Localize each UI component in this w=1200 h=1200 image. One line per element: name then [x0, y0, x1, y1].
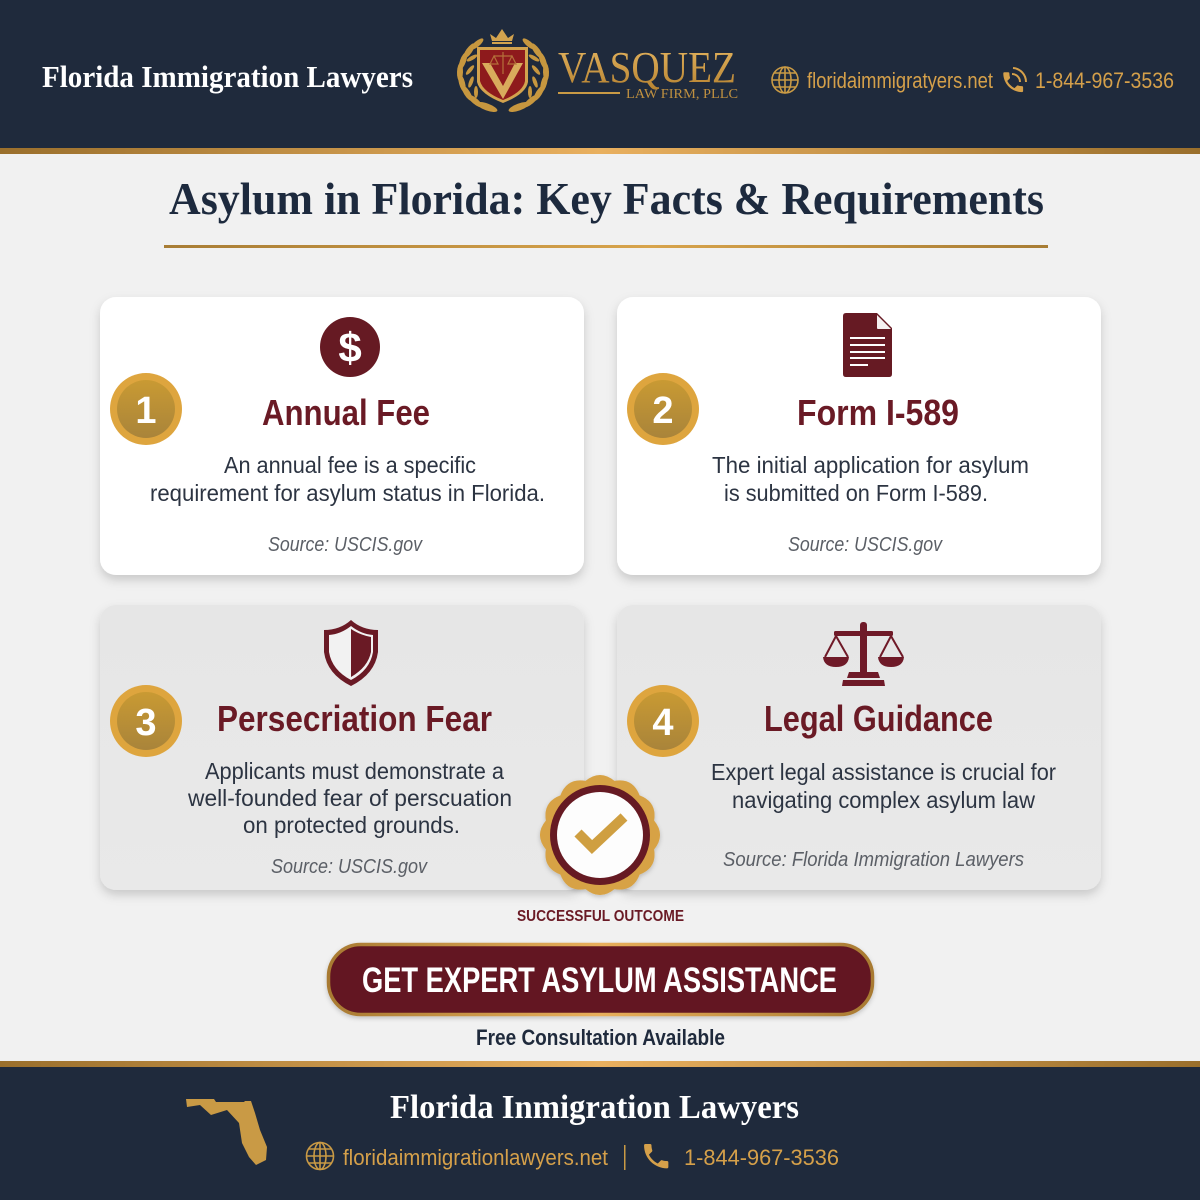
description: [711, 759, 1056, 813]
badge 1: [110, 373, 182, 445]
heading: Persecriation Fear: [217, 698, 492, 739]
call-to-action button: GET EXPERT ASYLUM ASSISTANCE: [362, 961, 837, 1000]
header band: [0, 0, 1200, 154]
icon: document: [843, 313, 892, 377]
badge 1: 1: [135, 390, 157, 432]
description: The initial application for asylum: [712, 452, 1029, 478]
logo crown: [490, 29, 514, 44]
logo: Vasquez crest: [457, 29, 549, 114]
footer contact: [306, 1142, 839, 1170]
title: Asylum in Florida: Key Facts & Requirements: [169, 173, 1044, 224]
description: An annual fee is a specific: [224, 452, 476, 478]
description: [712, 452, 1029, 506]
logo wordmark: VASQUEZ: [558, 43, 736, 92]
badge 2: 2: [652, 390, 674, 432]
icon: dollar: [320, 317, 380, 377]
source: Source: USCIS.gov: [788, 534, 943, 556]
description: [150, 452, 545, 506]
badge 4: 4: [652, 702, 674, 744]
footer contact: 1-844-967-3536: [684, 1145, 839, 1170]
icon: globe: [772, 67, 798, 93]
description: navigating complex asylum law: [732, 787, 1035, 813]
heading: Annual Fee: [262, 392, 430, 433]
header contact: floridaimmigratyers.net: [807, 68, 993, 93]
description: on protected grounds.: [243, 812, 460, 838]
badge 2: [627, 373, 699, 445]
source: Source: Florida Immigration Lawyers: [723, 849, 1024, 871]
header contact: 1-844-967-3536: [1035, 68, 1174, 93]
description: Expert legal assistance is crucial for: [711, 759, 1056, 785]
icon: Florida map: [186, 1099, 267, 1165]
icon: dollar: $: [338, 324, 362, 371]
seal caption: SUCCESSFUL OUTCOME: [517, 908, 684, 925]
logo wordmark: LAW FIRM, PLLC: [626, 87, 738, 102]
description: requirement for asylum status in Florida.: [150, 480, 545, 506]
call-to-action button: [328, 944, 872, 1014]
panel: annual fee: [100, 297, 584, 575]
panel: persecution fear: [100, 605, 584, 890]
footer band: [0, 1061, 1200, 1200]
footer globe: [306, 1142, 334, 1170]
badge 3: [110, 685, 182, 757]
heading: Legal Guidance: [764, 698, 993, 739]
description: is submitted on Form I-589.: [724, 480, 988, 506]
badge 3: 3: [135, 702, 157, 744]
footer contact: floridaimmigrationlawyers.net: [343, 1145, 608, 1170]
button note: Free Consultation Available: [476, 1025, 725, 1050]
panel: legal guidance: [617, 605, 1101, 890]
header firm name: Florida Immigration Lawyers: [42, 59, 413, 94]
badge 4: [627, 685, 699, 757]
source: Source: USCIS.gov: [268, 534, 423, 556]
footer firm name: Florida Inmigration Lawyers: [390, 1089, 799, 1126]
panel: form I-589: [617, 297, 1101, 575]
description: [187, 758, 512, 838]
source: Source: USCIS.gov: [271, 856, 428, 878]
icon: shield: [324, 620, 378, 686]
description: well-founded fear of perscuation: [187, 785, 512, 811]
header contact: [772, 67, 1174, 93]
seal: successful outcome: [540, 775, 660, 895]
description: Applicants must demonstrate a: [205, 758, 504, 784]
heading: Form I-589: [797, 392, 959, 433]
icon: scales: [823, 622, 904, 686]
